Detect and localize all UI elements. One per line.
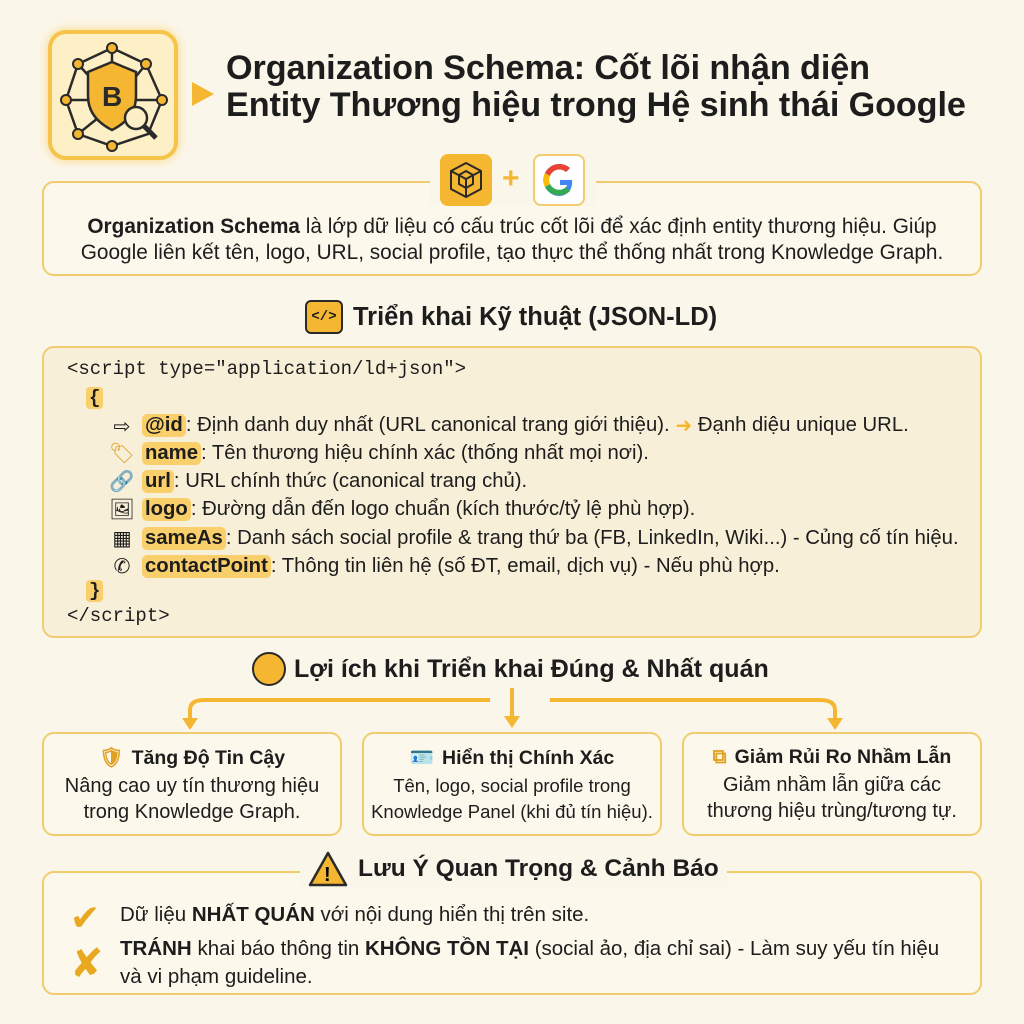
card: reduce risk: [682, 732, 982, 836]
code box: </script>: [67, 605, 170, 627]
code box: url: [145, 470, 171, 492]
warnings box: và vi phạm guideline.: [120, 965, 313, 988]
card: accurate display: 🪪: [410, 747, 434, 769]
card: accurate display: Tên, logo, social profile trong: [393, 775, 631, 796]
code box: ➜: [675, 415, 692, 437]
heading: warnings: !: [324, 864, 331, 886]
card: reduce risk: Giảm nhầm lẫn giữa các: [723, 774, 941, 796]
code box: : Định danh duy nhất (URL canonical trang giới thiệu). Đạnh diệu unique URL.: [186, 414, 909, 436]
code box: : Thông tin liên hệ (số ĐT, email, dịch vụ) - Nếu phù hợp.: [271, 554, 780, 576]
title: Entity Thương hiệu trong Hệ sinh thái Google: [226, 86, 966, 124]
code box: ⇨: [114, 416, 130, 438]
heading: warnings: [300, 851, 727, 887]
logo icon box: [48, 30, 178, 160]
warnings box: ✔: [70, 897, 100, 938]
card: trust: 🛡: [99, 747, 124, 769]
code box: name: [145, 442, 198, 464]
card: reduce risk: ⧉: [713, 746, 727, 768]
code box: sameAs: [145, 526, 223, 548]
code box: }: [89, 580, 100, 602]
code box: : Tên thương hiệu chính xác (thống nhất mọi nơi).: [201, 442, 649, 464]
card: accurate display: Knowledge Panel (khi đủ tín hiệu).: [371, 801, 653, 822]
warnings box: ✘: [70, 942, 104, 986]
title: [226, 49, 966, 124]
code box: ▦: [112, 528, 132, 550]
card: trust: trong Knowledge Graph.: [84, 801, 300, 823]
arrows to cards: [182, 688, 843, 730]
card: accurate display: Hiển thị Chính Xác: [442, 746, 614, 768]
code box: 🖼: [109, 499, 135, 521]
heading: benefits: Lợi ích khi Triển khai Đúng & Nhất quán: [294, 654, 769, 682]
card: reduce risk: Giảm Rủi Ro Nhầm Lẫn: [735, 746, 951, 768]
code box: {: [89, 387, 100, 409]
heading: technical: Triển khai Kỹ thuật (JSON-LD): [353, 302, 717, 330]
title: Organization Schema: Cốt lõi nhận diện: [226, 49, 870, 87]
card: trust: Tăng Độ Tin Cậy: [132, 746, 285, 768]
code box: 🔗: [109, 471, 135, 493]
code box: [42, 346, 982, 638]
warnings box: [42, 871, 982, 995]
intro box: Google liên kết tên, logo, URL, social profile, tạo thực thể thống nhất trong Knowledge Graph.: [81, 241, 943, 264]
card: reduce risk: thương hiệu trùng/tương tự.: [707, 800, 957, 822]
heading: technical: </>: [311, 309, 337, 325]
icons: schema + google: [430, 154, 596, 206]
code box: : Đường dẫn đến logo chuẩn (kích thước/tỷ lệ phù hợp).: [191, 498, 695, 520]
logo icon box: B: [102, 81, 122, 112]
code box: @id: [145, 414, 183, 436]
code box: : Danh sách social profile & trang thứ ba (FB, LinkedIn, Wiki...) - Củng cố tín hiệu.: [226, 526, 959, 548]
code box: logo: [145, 498, 188, 520]
code box: contactPoint: [145, 554, 268, 576]
code box: ✆: [114, 556, 130, 578]
code box: 🏷: [109, 443, 135, 465]
card: trust: Nâng cao uy tín thương hiệu: [65, 775, 319, 797]
arrow to title: [192, 82, 214, 106]
intro box: [42, 181, 982, 276]
heading: warnings: Lưu Ý Quan Trọng & Cảnh Báo: [358, 855, 719, 882]
code box: : URL chính thức (canonical trang chủ).: [174, 470, 527, 492]
card: trust: [42, 732, 342, 836]
warnings box: TRÁNH khai báo thông tin KHÔNG TỒN TẠI (social ảo, địa chỉ sai) - Làm suy yếu tín hiệu: [120, 937, 939, 960]
warnings box: Dữ liệu NHẤT QUÁN với nội dung hiển thị trên site.: [120, 903, 589, 926]
icons: schema + google: +: [502, 162, 520, 195]
intro box: Organization Schema là lớp dữ liệu có cấu trúc cốt lõi để xác định entity thương hiệu. Giúp: [87, 215, 937, 238]
code box: <script type="application/ld+json">: [67, 358, 466, 380]
card: accurate display: [362, 732, 662, 836]
